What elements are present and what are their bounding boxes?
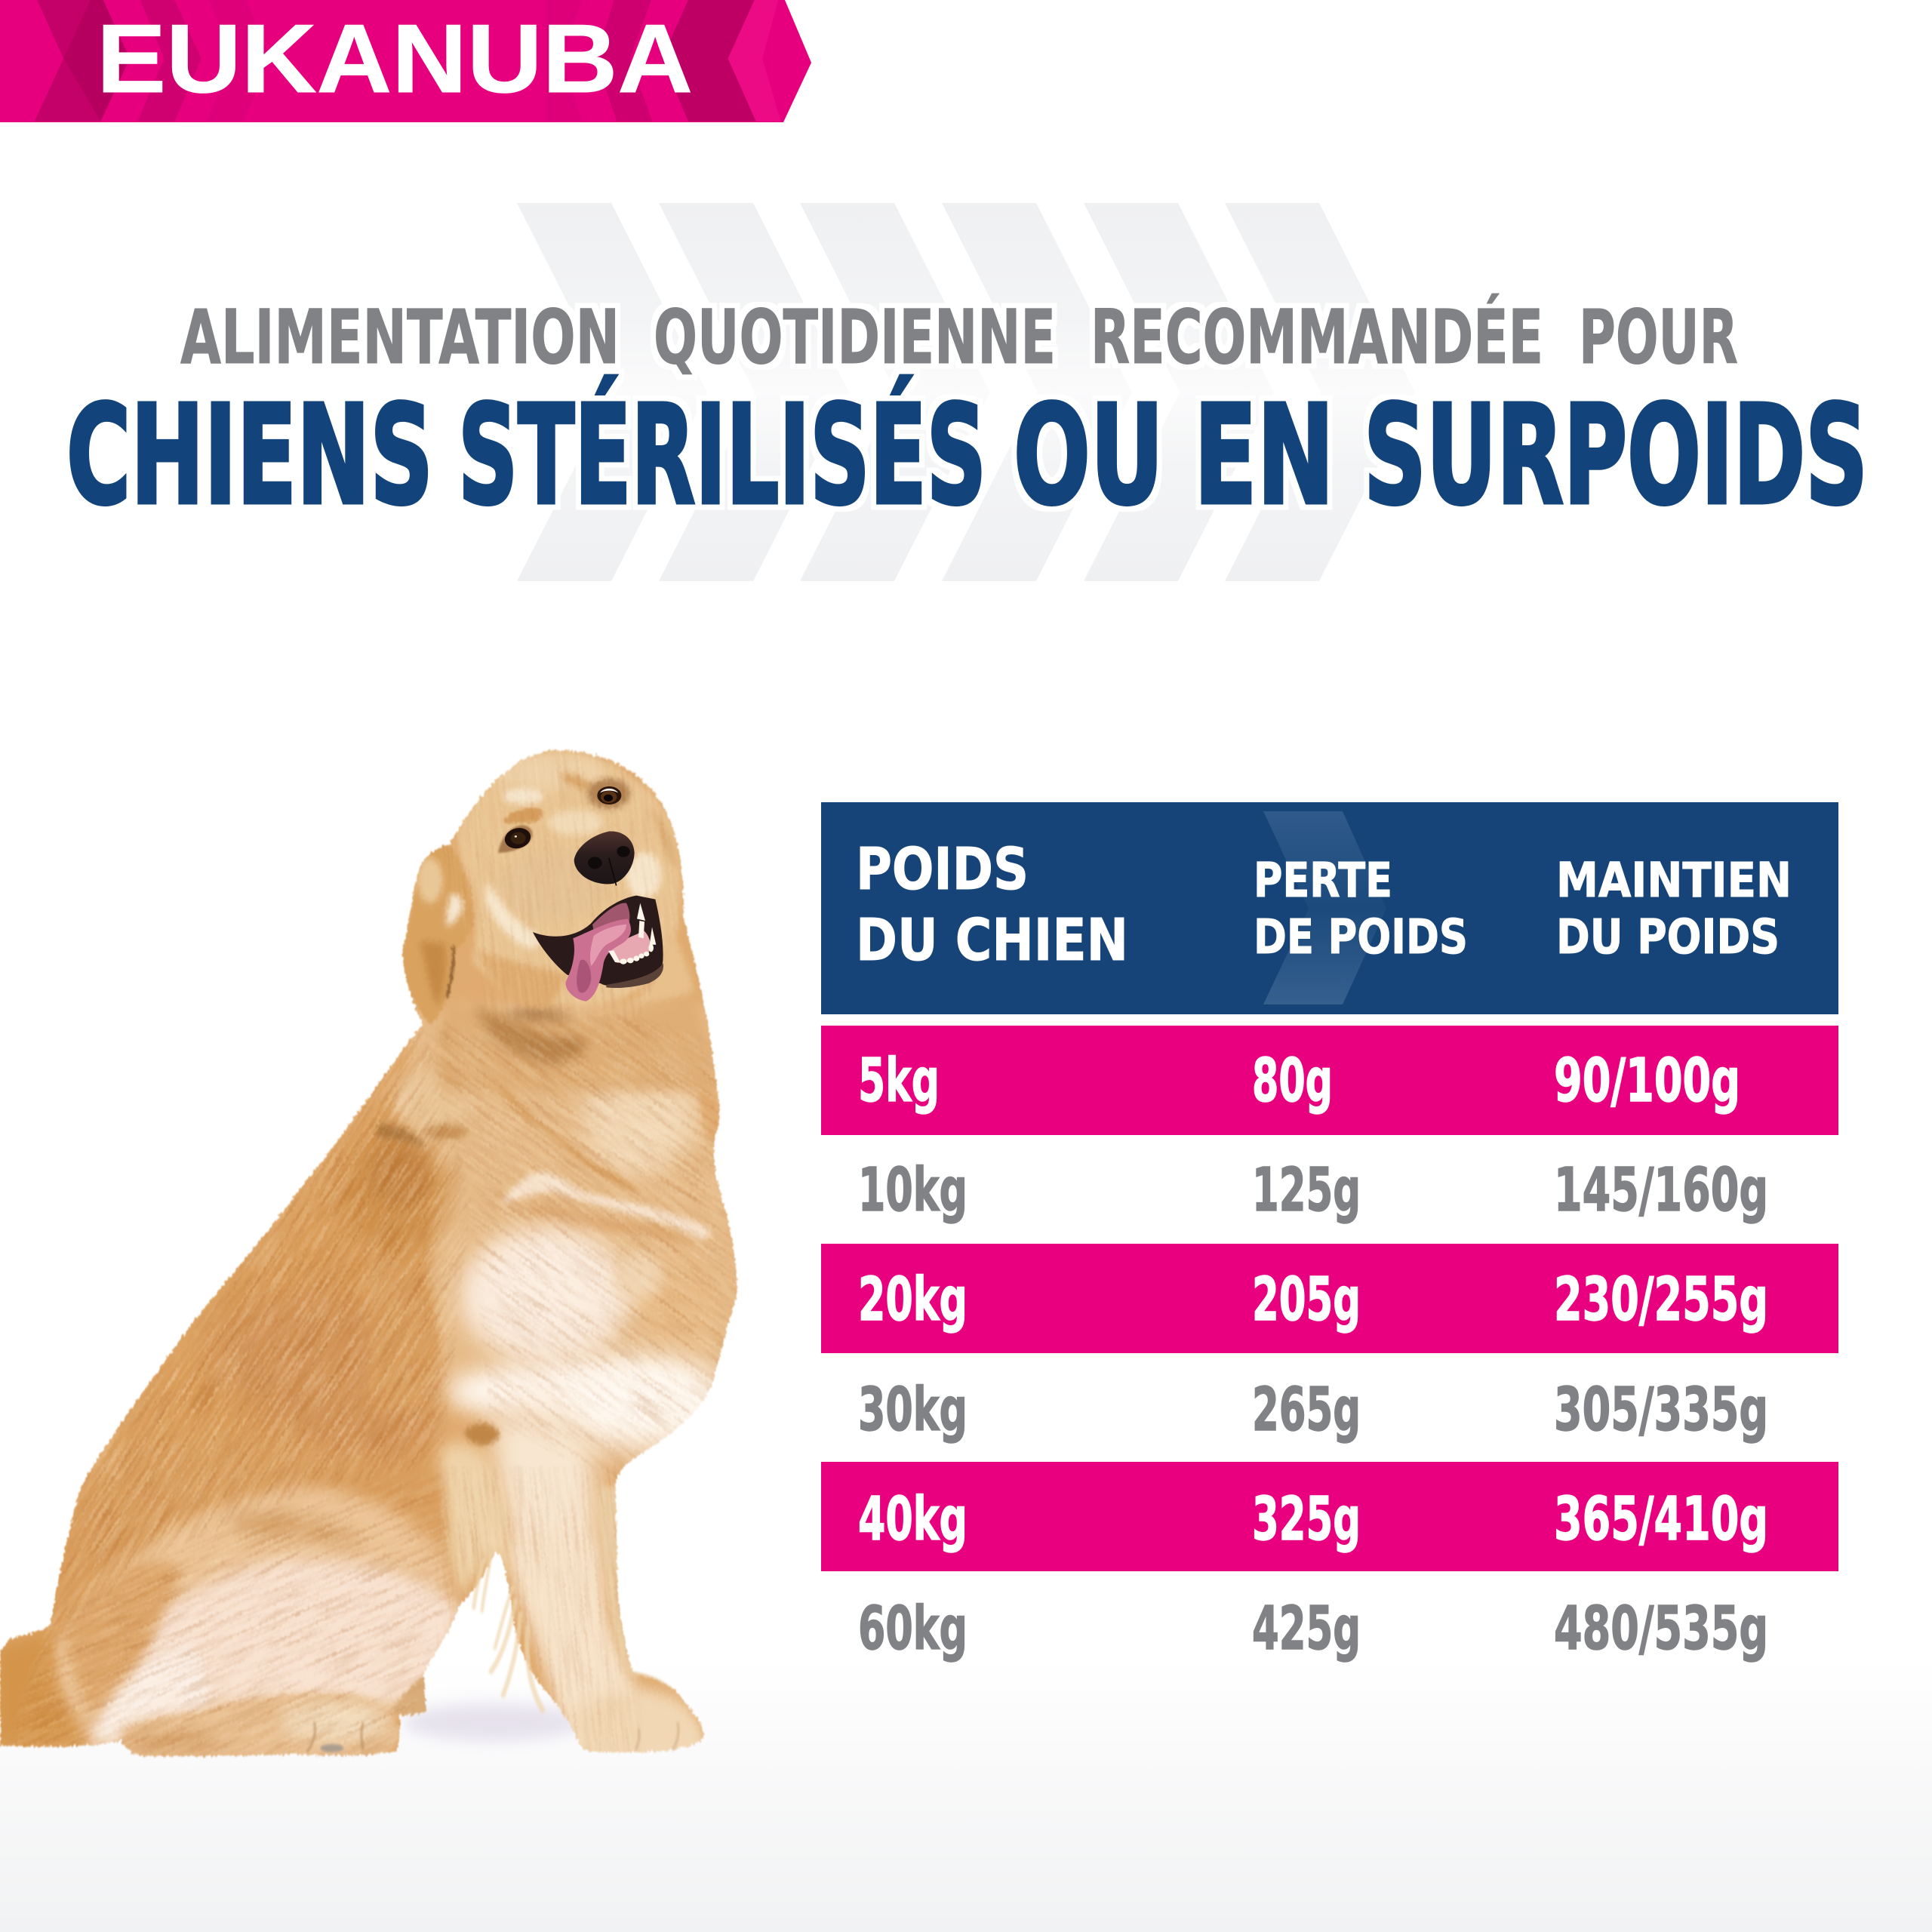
title line 2: OU (1014, 376, 1164, 535)
title line 2: CHIENS (66, 376, 433, 535)
row 10kg: 125g (1252, 1155, 1361, 1225)
tail (0, 1635, 86, 1749)
light band (503, 1172, 712, 1240)
ear white (446, 893, 463, 927)
far foot (631, 1672, 685, 1722)
lower lip (606, 963, 663, 988)
row 40kg: 365/410g (1554, 1484, 1768, 1554)
back coat (38, 1063, 432, 1639)
ruff base (408, 1004, 749, 1411)
row 10kg (858, 1155, 1768, 1225)
brand banner (0, 0, 811, 122)
column head: poids du chien: DU CHIEN (856, 907, 1128, 974)
ear light (417, 858, 443, 903)
table header (821, 802, 1838, 1014)
left lower body (370, 1245, 438, 1411)
lower chest white (555, 1358, 731, 1452)
coat streaks: head (441, 751, 683, 1021)
neck below head (438, 991, 724, 1092)
row 30kg (858, 1375, 1768, 1444)
chest layers (342, 1004, 749, 1421)
column head: perte de poids: PERTE (1254, 853, 1392, 908)
coat streaks: legs (437, 1466, 643, 1755)
far leg (598, 1486, 638, 1681)
eye left (498, 825, 533, 853)
muzzle right (626, 853, 662, 898)
column head: perte de poids: DE POIDS (1254, 909, 1468, 964)
tongue (565, 918, 631, 1001)
thigh fluff (54, 1486, 449, 1736)
column head: poids du chien: POIDS (856, 836, 1029, 903)
skull (457, 751, 681, 1006)
under chin shadow (493, 1009, 579, 1064)
right cheek (649, 805, 677, 870)
row 30kg: 305/335g (1554, 1375, 1768, 1444)
teeth (608, 903, 656, 964)
logo wordmark: EUKANUBA (97, 5, 693, 113)
row 30kg: 265g (1252, 1375, 1361, 1444)
coat streaks: haunch (0, 1472, 457, 1755)
forehead top (491, 755, 606, 790)
dog head base layers (402, 751, 724, 1092)
feathering (441, 1443, 508, 1594)
dog photo illustration (0, 724, 776, 1776)
tongue highlight (590, 924, 626, 966)
gum (609, 931, 651, 963)
feeding table (821, 802, 1838, 1663)
tongue shade (577, 960, 591, 992)
thigh swirl (64, 1562, 177, 1716)
ear (402, 840, 475, 1024)
column head: maintien du poids: DU POIDS (1556, 909, 1780, 964)
background chevrons (517, 203, 1415, 581)
elbow patch (464, 1423, 500, 1445)
coat streaks: back (0, 1021, 471, 1749)
face features (498, 786, 663, 1001)
row 60kg: 480/535g (1554, 1594, 1768, 1663)
right edge orange (689, 1049, 724, 1142)
row 40kg: 325g (1252, 1484, 1361, 1554)
banner ribbon (0, 0, 811, 122)
eye right (597, 786, 621, 804)
shoulder tuft (392, 1066, 478, 1132)
front leg (511, 1531, 701, 1755)
chest bottom (448, 1361, 709, 1421)
saddle wide (342, 1134, 448, 1255)
back lower (45, 1439, 447, 1628)
forehead blaze (503, 788, 543, 804)
nose (574, 832, 635, 885)
right jaw (629, 931, 694, 1006)
row 20kg (821, 1244, 1838, 1353)
row 5kg: 5kg (858, 1046, 940, 1115)
title line 2: STÉRILISÉS (458, 375, 986, 535)
brow left (503, 808, 543, 824)
right streaks (614, 1253, 664, 1298)
dog coat base (0, 724, 776, 1776)
title line 1: POUR (1579, 294, 1738, 381)
paw highlight (280, 1702, 388, 1742)
upper right light (581, 1054, 697, 1175)
title line 1: ALIMENTATION (180, 294, 620, 381)
thigh cream (118, 1559, 459, 1722)
front leg upper blend (491, 1405, 599, 1601)
banner facets (35, 0, 781, 122)
muzzle (498, 851, 609, 921)
shoulder crease (377, 1124, 428, 1147)
right eye surround (587, 779, 630, 809)
ear crease (447, 946, 454, 998)
row 20kg: 20kg (858, 1265, 968, 1334)
row 40kg (821, 1462, 1838, 1571)
ear shade (420, 941, 446, 1006)
chest center (460, 1228, 632, 1364)
saddle core (373, 1144, 431, 1204)
row 10kg: 10kg (858, 1155, 968, 1225)
header background (821, 802, 1838, 1014)
bridge (549, 810, 604, 835)
chest core (493, 1247, 594, 1323)
row 20kg: 205g (1252, 1265, 1361, 1334)
row 20kg: 230/255g (1554, 1265, 1768, 1334)
row 40kg: 40kg (858, 1484, 968, 1554)
title line 2: EN (1194, 376, 1334, 535)
tuft shade (423, 1124, 468, 1140)
row 5kg (821, 1026, 1838, 1135)
row 10kg: 145/160g (1554, 1155, 1768, 1225)
column head: poids du chien (856, 836, 1128, 974)
hidden hind paw (392, 1675, 427, 1715)
row 30kg: 30kg (858, 1375, 968, 1444)
title line 1: RECOMMANDÉE (1091, 293, 1543, 381)
column head: perte de poids (1254, 853, 1468, 964)
flank shade (231, 1310, 424, 1446)
cheek blaze (485, 881, 540, 949)
orange band (528, 1200, 715, 1273)
brow right (561, 774, 594, 791)
row 60kg (858, 1594, 1768, 1663)
jaw fur (475, 949, 566, 1009)
background floor gradient (0, 1660, 1932, 1932)
neck shadow (443, 1024, 485, 1092)
row 5kg: 90/100g (1554, 1046, 1740, 1115)
mouth (533, 896, 663, 1001)
coat streaks: chest (422, 1014, 741, 1479)
front paw (570, 1690, 702, 1755)
column head: maintien du poids (1556, 853, 1792, 964)
row 60kg: 425g (1252, 1594, 1361, 1663)
paw claws (307, 1722, 678, 1752)
floor shadow (402, 1703, 584, 1741)
front leg feathers (474, 1553, 543, 1710)
title line 1: QUOTIDIENNE (654, 294, 1056, 381)
header chevron (1263, 811, 1386, 1004)
dog body (0, 724, 776, 1776)
haunch orange streak (235, 1512, 363, 1543)
right lobe (644, 1247, 719, 1353)
paw heel shade (123, 1731, 221, 1753)
column head: maintien du poids: MAINTIEN (1556, 853, 1792, 908)
neck shadow under jaw (475, 1004, 589, 1065)
palate (592, 903, 629, 931)
haunch white (88, 1647, 208, 1746)
row 5kg: 80g (1252, 1046, 1333, 1115)
neck flow (470, 1026, 644, 1192)
title line 1 (180, 293, 1738, 381)
title line 2 (66, 375, 1868, 535)
row 60kg: 60kg (858, 1594, 968, 1663)
rear paw (120, 1692, 400, 1758)
